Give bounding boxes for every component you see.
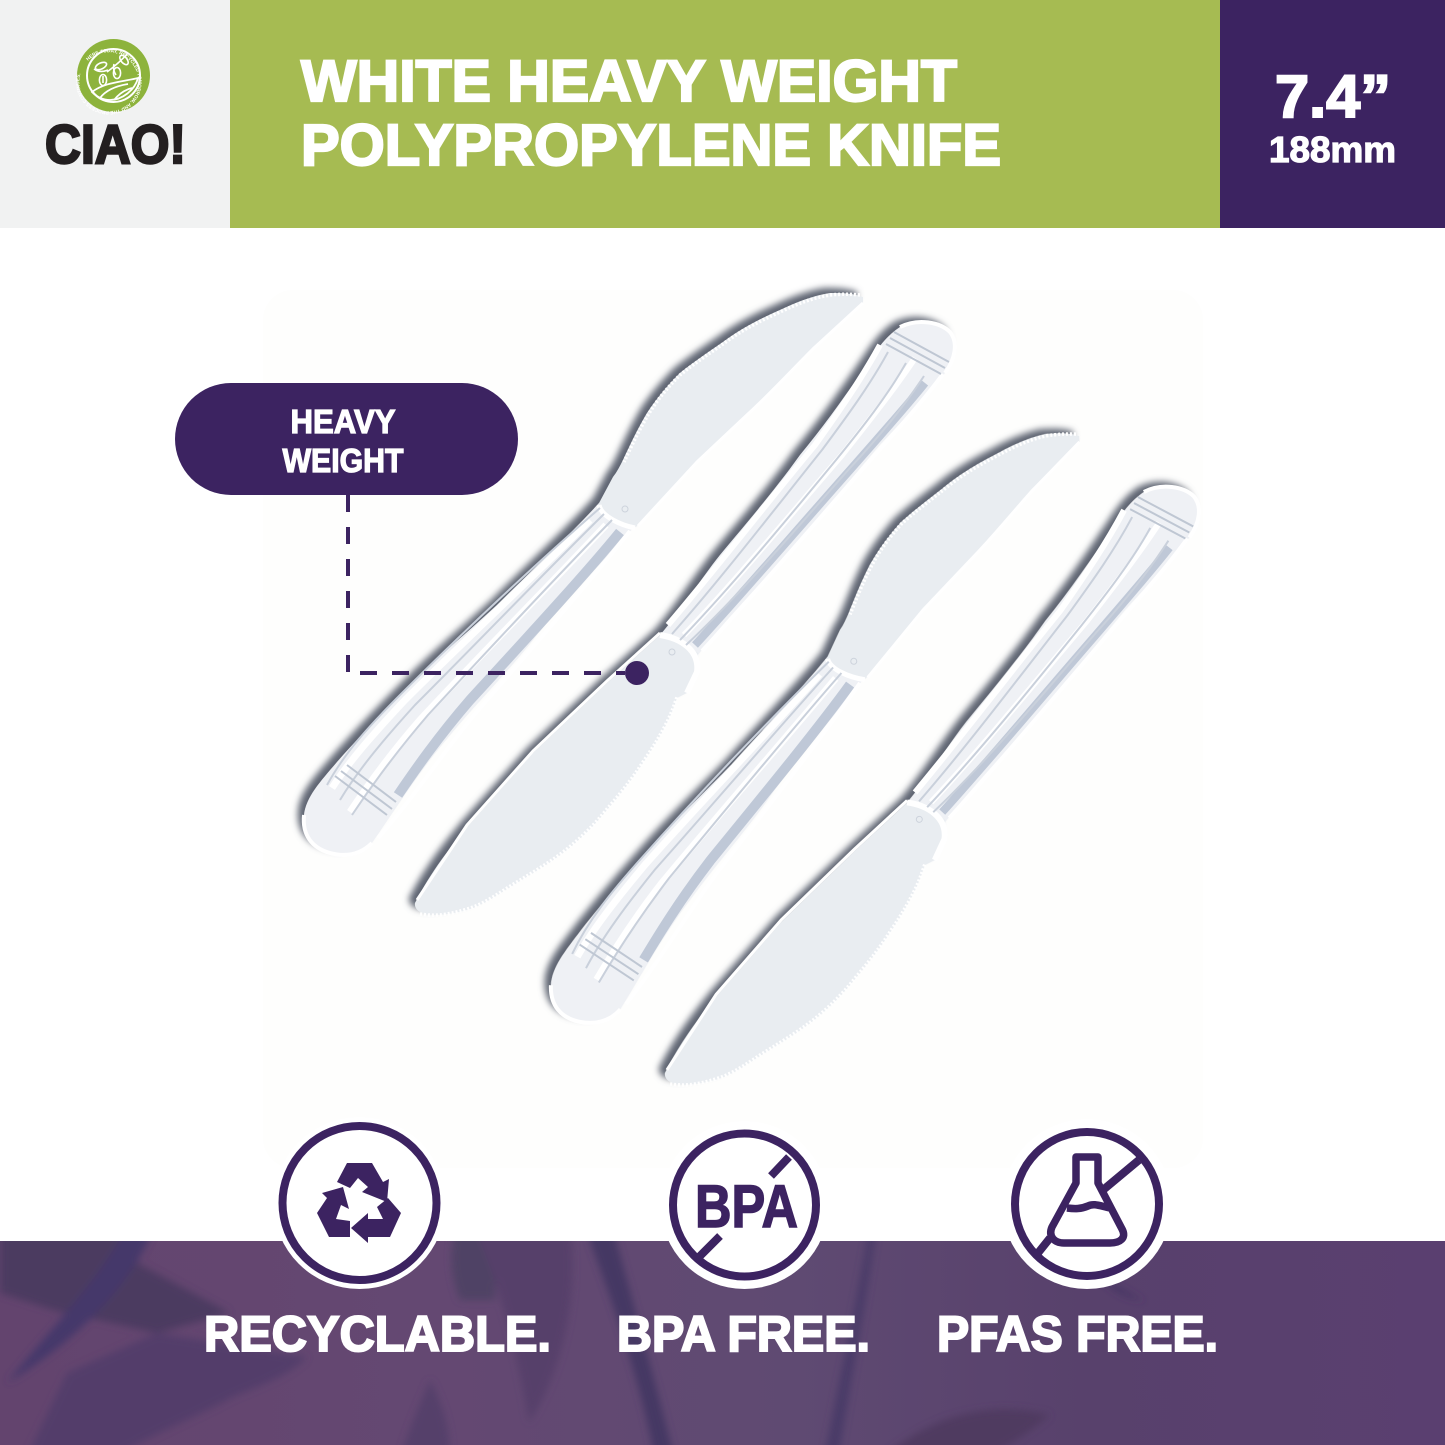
title line 2: POLYPROPYLENE KNIFE bbox=[301, 113, 1001, 178]
flask bbox=[1051, 1157, 1124, 1243]
knife 3 bbox=[521, 432, 1111, 1025]
footer band with leaf background bbox=[0, 1225, 1445, 1445]
product photo backdrop bbox=[263, 290, 1203, 1168]
icon: BPA free bbox=[660, 1121, 828, 1289]
header: title banner bbox=[230, 0, 1220, 228]
callout leader line bbox=[348, 495, 625, 673]
strike line bbox=[1038, 1160, 1139, 1253]
label: recyclable: RECYCLABLE. bbox=[204, 1306, 551, 1362]
logo badge: HERE TODAY, RECYCLED TOMORROW, AND THE PROCESS CONTINUES. bbox=[76, 49, 142, 114]
icon: recyclable bbox=[274, 1117, 446, 1289]
size in inches: 7.4” bbox=[1275, 63, 1391, 130]
label: PFAS free: PFAS FREE. bbox=[937, 1306, 1218, 1362]
knife 2 bbox=[415, 322, 955, 915]
label: BPA free: BPA FREE. bbox=[617, 1306, 870, 1362]
strike line bbox=[698, 1157, 789, 1258]
header: logo panel bbox=[0, 0, 230, 228]
knife 4 bbox=[659, 486, 1205, 1085]
title line 1: WHITE HEAVY WEIGHT bbox=[301, 49, 957, 114]
knife 1 bbox=[304, 293, 863, 855]
size in millimetres: 188mm bbox=[1269, 129, 1396, 170]
callout label: HEAVY bbox=[290, 403, 396, 440]
recycling arrows bbox=[317, 1163, 401, 1243]
callout dot bbox=[625, 661, 649, 685]
logo wordmark: CIAO! bbox=[45, 113, 186, 175]
header: size panel bbox=[1220, 0, 1445, 228]
callout: heavy weight bbox=[175, 383, 649, 685]
icon: PFAS free bbox=[1002, 1119, 1172, 1289]
callout label bbox=[282, 403, 404, 479]
callout label: WEIGHT bbox=[282, 442, 404, 479]
BPA lettering: BPA bbox=[695, 1173, 798, 1240]
